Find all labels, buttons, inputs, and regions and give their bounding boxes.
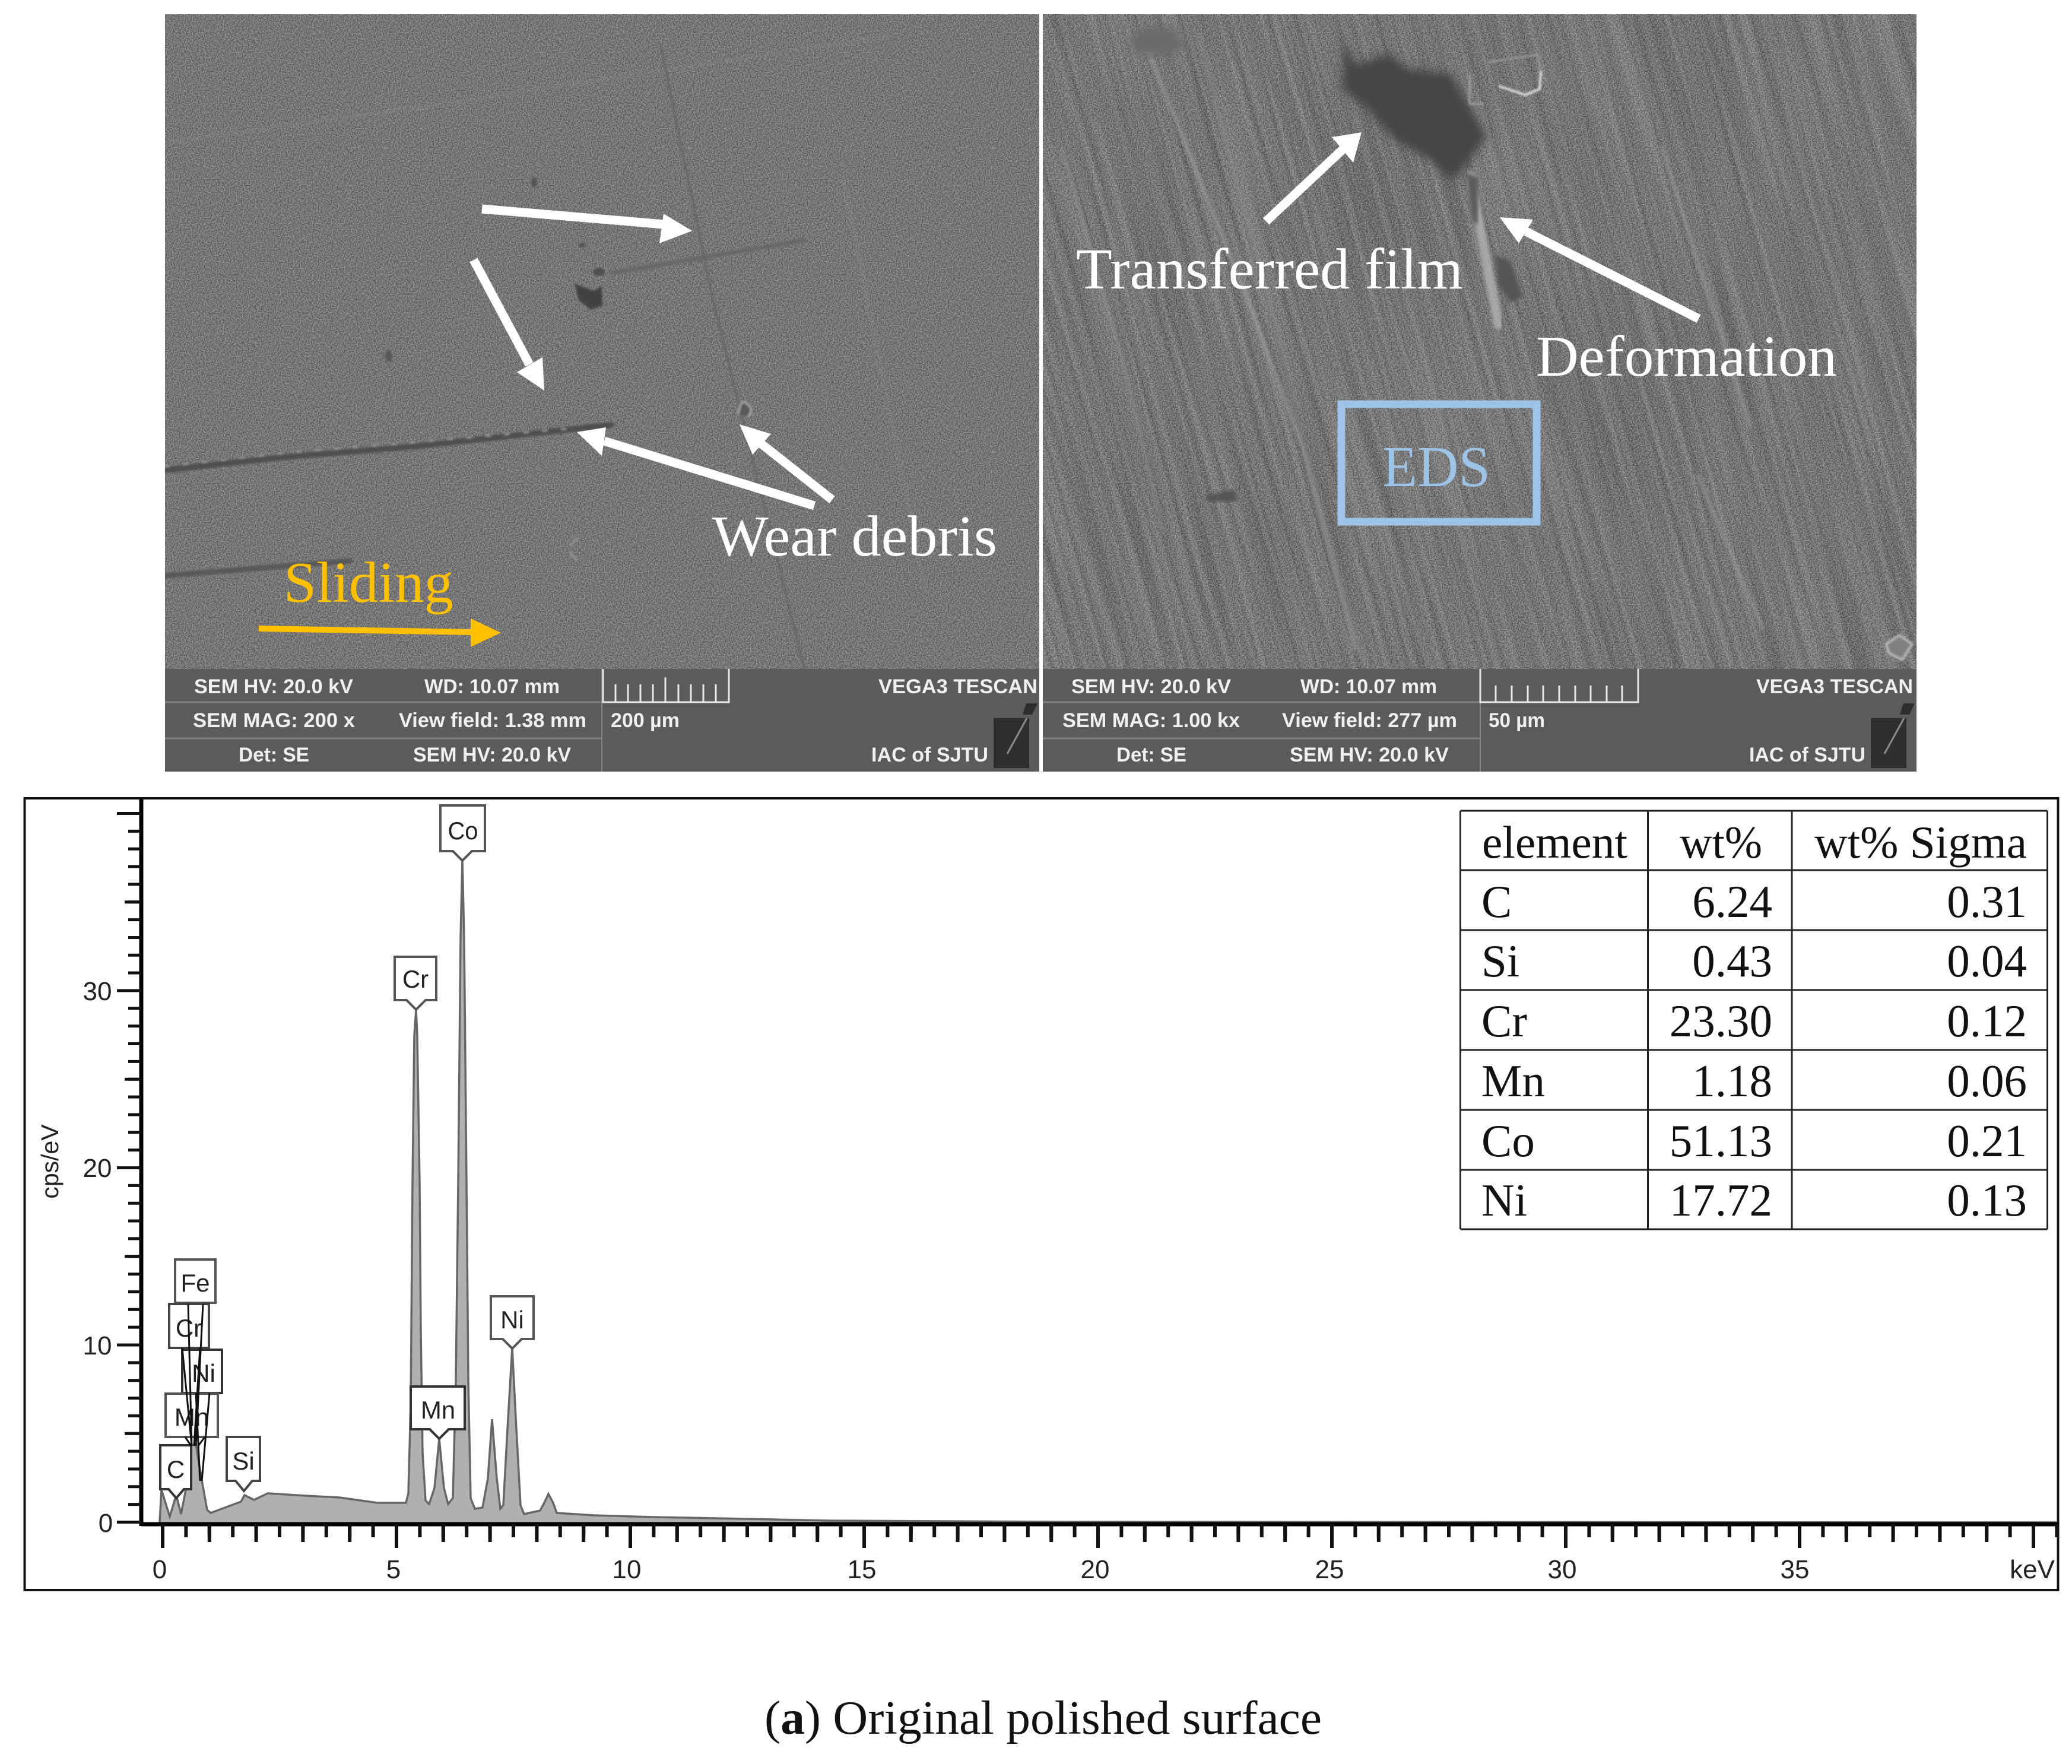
info bar: right micrograph: SEM HV: 20.0 kV [1071,675,1231,698]
y axis labels: 20 [83,1154,112,1183]
table rows: 17.72 [1670,1175,1772,1226]
table rows: 6.24 [1692,876,1772,927]
peak label: Si [227,1437,260,1491]
label: Wear debris: Wear debris [712,505,997,569]
table rows: 0.21 [1947,1115,2027,1166]
low energy peak labels cluster [160,1259,222,1498]
composition table [1460,811,2048,1229]
info bar: right micrograph: 50 µm [1489,709,1545,732]
info bar: right micrograph: IAC of SJTU [1749,744,1865,766]
peak label: Cr: Cr [402,965,429,993]
peak label: Cr low energy [169,1304,209,1348]
table rows: Ni [1481,1175,1527,1226]
peak label: Mn low energy [166,1394,218,1437]
caption: (a) Original polished surface [764,1692,1322,1744]
chart: EDS spectrum [25,798,2058,1590]
table rows: 0.43 [1692,935,1772,986]
y axis labels: 10 [83,1331,112,1360]
table rows: 23.30 [1670,995,1772,1046]
scale bar: 50 um [1480,669,1638,702]
table header: element [1482,817,1627,868]
peak label: C [160,1445,191,1498]
table rows: 0.13 [1947,1175,2027,1226]
peak label: Ni: Ni [500,1306,524,1334]
info bar: left micrograph: IAC of SJTU [871,744,988,766]
panel: right SEM micrograph [773,0,2072,1028]
info bar: right micrograph: Det: SE [1116,744,1186,766]
peak label: Mn low energy: Mn [174,1403,209,1431]
table rows: Co [1481,1115,1535,1166]
y axis labels: 30 [83,977,112,1006]
transferred film dark patch [1131,27,1522,502]
table rows: Mn [1481,1055,1545,1106]
peak label: Ni [491,1296,534,1349]
info bar: left micrograph [165,669,1039,772]
scale bar: 200 um [603,669,729,702]
info bar: left micrograph: SEM HV: 20.0 kV [413,744,571,766]
table header: wt% Sigma [1814,817,2027,868]
table rows: 0.06 [1947,1055,2027,1106]
panel: left SEM micrograph [165,14,1039,772]
x axis labels [153,1555,2055,1584]
debris speck lower right [1886,635,1912,660]
label: Transferred film: Transferred film [1076,237,1463,302]
info bar: left micrograph: Det: SE [239,744,309,766]
x axis labels: 15 [848,1555,876,1584]
x axis labels: 5 [386,1555,401,1584]
info bar: left micrograph: SEM HV: 20.0 kV [194,675,353,698]
info bar: left micrograph: VEGA3 TESCAN [878,675,1037,698]
info bar: left micrograph: WD: 10.07 mm [424,675,560,698]
info bar: right micrograph: View field: 277 µm [1282,709,1457,732]
peak label: Mn: Mn [421,1396,455,1424]
info bar: left micrograph: 200 µm [611,709,680,732]
arrow: sliding direction [259,618,501,647]
y axis labels: 0 [99,1509,113,1538]
x axis labels: 30 [1548,1555,1576,1584]
table header [1482,817,2027,868]
peak label: Cr [395,957,436,1010]
table rows: 0.31 [1947,876,2027,927]
table rows: 51.13 [1670,1115,1772,1166]
info bar: right micrograph: VEGA3 TESCAN [1756,675,1913,698]
debris crystal outline [1470,55,1541,104]
table rows: Cr [1481,995,1527,1046]
peak label: Si: Si [232,1447,255,1475]
info bar: right micrograph: SEM HV: 20.0 kV [1290,744,1449,766]
peak label: C: C [167,1455,185,1483]
table rows: 0.12 [1947,995,2027,1046]
y axis title: cps/eV [36,1124,64,1199]
label: Sliding: Sliding [284,551,453,615]
table rows: C [1481,876,1512,927]
logo: TESCAN [1871,703,1915,768]
label: Deformation: Deformation [1536,325,1837,389]
spectrum trace [160,861,2057,1523]
peak label: Fe: Fe [180,1269,210,1297]
logo: TESCAN [994,703,1037,768]
peak label: Co: Co [448,817,478,845]
arrow: wear debris to scratch tip [577,427,814,506]
arrow: deformation pointer [1500,217,1699,319]
peak label: Fe [175,1259,215,1303]
x axis labels: 35 [1781,1555,1809,1584]
peak label: Mn [411,1387,465,1439]
arrow: wear debris to particle [740,424,832,500]
table rows: Si [1481,935,1519,986]
info bar: left micrograph: View field: 1.38 mm [399,709,586,732]
y axis [129,798,141,1526]
x axis labels: 20 [1081,1555,1109,1584]
info bar: left micrograph: SEM MAG: 200 x [193,709,355,732]
arrow: upper debris pointer [482,209,692,243]
y axis labels [83,977,113,1538]
EDS region box [1341,404,1537,522]
wear scratches [165,45,804,668]
info bar: right micrograph [1043,669,1916,772]
x axis labels: 10 [613,1555,641,1584]
peak label: Ni low energy: Ni [192,1359,215,1387]
table rows: 1.18 [1692,1055,1772,1106]
arrow: transferred film pointer [1266,132,1362,221]
info bar: right micrograph: WD: 10.07 mm [1300,675,1437,698]
peak label: Cr low energy: Cr [176,1314,202,1342]
x axis labels: 25 [1315,1555,1344,1584]
table rows [1481,876,2027,1226]
table rows: 0.04 [1947,935,2027,986]
label leader lines [182,1304,210,1481]
EDS region box: EDS [1382,435,1490,499]
x axis labels: 0 [153,1555,167,1584]
arrow: left debris pointer [474,260,544,391]
x axis labels: keV [2010,1555,2055,1584]
table header: wt% [1680,817,1762,868]
peak label: Ni low energy [182,1350,222,1393]
peak label: Co [440,805,485,861]
x axis [141,1524,2058,1536]
debris and dark spots [385,177,751,561]
info bar: right micrograph: SEM MAG: 1.00 kx [1062,709,1240,732]
